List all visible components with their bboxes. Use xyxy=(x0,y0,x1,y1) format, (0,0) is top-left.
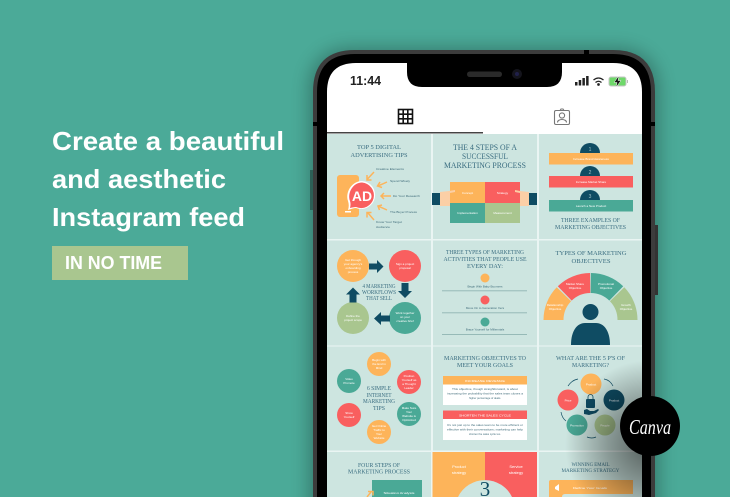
matrix: Concept xyxy=(462,191,473,195)
heading: EVERY DAY: xyxy=(467,263,503,270)
card: sales cycle xyxy=(443,410,527,440)
circles: Define the xyxy=(346,314,360,318)
circles: your agency's xyxy=(344,262,363,266)
screen xyxy=(327,63,650,497)
card: sales cycle: effective with their conversations; marketing can help xyxy=(447,428,523,432)
heading: MARKETING PROCESS xyxy=(348,470,410,476)
circles: the End in xyxy=(372,362,386,366)
canva badge: Canva xyxy=(629,415,671,439)
cell: three types xyxy=(433,240,537,346)
circles xyxy=(558,374,624,436)
heading: INTERNET xyxy=(366,392,392,399)
circles: Price xyxy=(565,398,572,402)
circles: Traffic to xyxy=(373,428,385,432)
heading: 6 SIMPLE xyxy=(367,385,391,392)
cell: four steps xyxy=(327,452,431,497)
step: situation analysis: Situation Analysis xyxy=(384,491,415,495)
labels: Audience xyxy=(376,225,390,229)
circles: Begin with xyxy=(372,358,386,362)
heading: ACTIVITIES THAT PEOPLE USE xyxy=(444,256,527,263)
list: Begin With Baby Boomers xyxy=(467,284,503,288)
circles: on your xyxy=(400,315,410,319)
circles: project scope xyxy=(344,318,362,322)
circles: Your xyxy=(376,432,382,436)
circles: Website xyxy=(374,436,385,440)
wifi xyxy=(594,78,604,85)
circles: a Thought xyxy=(402,382,416,386)
heading: THREE TYPES OF MARKETING xyxy=(446,249,524,256)
cell: product and service strategy xyxy=(432,452,537,497)
heading: TYPES OF MARKETING xyxy=(556,250,627,257)
circles: creative brief xyxy=(396,319,414,323)
headline: and aesthetic xyxy=(52,164,226,194)
matrix: Measurement xyxy=(493,211,512,215)
icon: grid tab xyxy=(398,110,412,124)
bars: 2 xyxy=(589,170,592,176)
heading: MARKETING STRATEGY xyxy=(562,468,620,474)
heading xyxy=(562,462,620,474)
circles: Optimized xyxy=(402,418,416,422)
semicircle chart: Objective xyxy=(569,286,582,290)
circles xyxy=(337,250,421,334)
labels: The Buyer Process xyxy=(390,210,418,214)
heading: SUCCESSFUL xyxy=(462,152,508,161)
semicircle chart: Relationship xyxy=(547,303,564,307)
labels xyxy=(376,167,420,229)
circles: Yourself as xyxy=(402,378,417,382)
heading: OBJECTIVES xyxy=(572,258,611,265)
bars: 1 xyxy=(589,147,592,153)
circles: Product xyxy=(609,398,619,402)
labels: Creative Elements xyxy=(376,167,405,171)
semicircle chart xyxy=(544,273,638,320)
circles: Yourself xyxy=(344,415,355,419)
tab underline xyxy=(327,132,483,134)
heading: TOP 5 DIGITAL xyxy=(357,144,401,151)
semicircle chart: Market Share xyxy=(566,282,584,286)
cycle arrows xyxy=(561,379,613,438)
heading: ADVERTISING TIPS xyxy=(350,152,408,159)
heading xyxy=(556,251,626,263)
circles: Get Online xyxy=(372,424,387,428)
card: sales cycle: It's not just up to the sales team to be more efficient or xyxy=(447,423,523,427)
cell: product and service strategy: strategy xyxy=(509,470,523,475)
headline: Create a beautiful xyxy=(52,126,284,156)
icon: tagged tab xyxy=(554,109,570,124)
heading xyxy=(350,145,408,157)
cell: product and service strategy: Service xyxy=(509,464,523,469)
heading xyxy=(556,356,625,367)
card: revenue: increasing the probability that the sales team closes a xyxy=(447,392,523,396)
circles: Your xyxy=(406,410,412,414)
heading xyxy=(444,144,526,168)
cell: product and service strategy: Product xyxy=(452,464,467,469)
card: revenue: This objective, though straightforward, is about xyxy=(452,387,518,391)
semicircle chart: Objective xyxy=(549,307,562,311)
heading: MARKETING OBJECTIVES TO xyxy=(444,355,526,362)
cell: internet marketing tips xyxy=(327,346,431,450)
badge: in no time: IN NO TIME xyxy=(65,253,162,273)
circles: proposal xyxy=(399,266,411,270)
card: revenue: INCREASE REVENUE xyxy=(465,379,505,383)
circles xyxy=(337,352,421,444)
circles: People xyxy=(600,424,610,428)
bars: Increase Brand Awareness xyxy=(573,157,609,161)
badge: in no time xyxy=(52,246,188,280)
phone frame xyxy=(310,50,658,497)
cell: email strategy xyxy=(539,452,642,497)
card: sales cycle: SHORTEN THE SALES CYCLE xyxy=(459,414,511,418)
heading: MARKETING OBJECTIVES xyxy=(555,224,626,231)
heading: THREE EXAMPLES OF xyxy=(561,217,620,224)
circles: Product xyxy=(586,382,596,386)
matrix: Strategy xyxy=(497,191,509,195)
heading xyxy=(362,284,396,300)
canva badge xyxy=(620,396,680,456)
circles: onboarding xyxy=(345,266,361,270)
heading xyxy=(444,356,526,367)
card: sales cycle: shorten the sales cycle too. xyxy=(469,432,501,436)
card: revenue: higher percentage of deals. xyxy=(469,396,501,400)
circles: Show xyxy=(345,411,354,415)
heading xyxy=(555,218,626,229)
list xyxy=(442,274,527,335)
circles: Sign a project xyxy=(396,262,414,266)
bars: Launch a New Product xyxy=(576,204,606,208)
circles: Video xyxy=(345,377,353,381)
heading xyxy=(444,250,526,268)
heading: WORKFLOWS xyxy=(362,289,396,296)
notch xyxy=(407,60,562,87)
list: Brace Yourself for Millennials xyxy=(466,328,505,332)
cell: advertising tips xyxy=(327,134,431,239)
semicircle chart: Objective xyxy=(600,286,613,290)
circles: Leader xyxy=(404,386,414,390)
circles: Promotion xyxy=(570,424,584,428)
heading: 4 MARKETING xyxy=(362,283,396,290)
step: define goals: Define Your Goals xyxy=(573,486,608,490)
circles: Make Sure xyxy=(402,406,417,410)
cell: 5 Ps xyxy=(539,346,642,450)
arrows xyxy=(346,260,412,325)
heading: TIPS xyxy=(373,405,385,412)
circles: Website is xyxy=(402,414,416,418)
labels: Know Your Target xyxy=(376,220,402,224)
bars: 3 xyxy=(589,194,592,200)
cell: objectives to goals xyxy=(433,346,537,450)
signal xyxy=(575,76,589,86)
bars xyxy=(549,143,633,212)
circles: process xyxy=(348,270,359,274)
heading: WINNING EMAIL xyxy=(572,462,610,468)
circles: Get through xyxy=(345,258,361,262)
matrix: Implementation xyxy=(457,211,478,215)
arrows xyxy=(367,172,391,220)
status icons xyxy=(575,76,628,88)
heading: THE 4 STEPS OF A xyxy=(453,143,517,152)
status time: 11:44 xyxy=(350,73,382,88)
circles: Work together xyxy=(396,311,414,315)
cell: workflows xyxy=(327,240,431,346)
cell: types of objectives xyxy=(539,240,642,346)
heading: WHAT ARE THE 5 P'S OF xyxy=(556,356,626,362)
semicircle chart: Promotional xyxy=(598,282,614,286)
heading: MARKETING xyxy=(363,398,395,405)
headline xyxy=(52,126,284,232)
icon: phone with AD bubble: AD xyxy=(352,188,372,204)
bars: Increase Market Share xyxy=(576,180,606,184)
headline: Instagram feed xyxy=(52,202,245,232)
heading xyxy=(348,463,410,476)
matrix xyxy=(450,182,520,223)
phone shadow xyxy=(309,48,659,497)
labels: Do Your Research xyxy=(393,194,420,198)
labels: Spend Wisely xyxy=(390,179,411,183)
heading: THAT SELL xyxy=(366,295,392,302)
canva shadow xyxy=(560,355,650,497)
phone xyxy=(310,50,658,497)
card: revenue xyxy=(443,376,527,405)
circles: Promote xyxy=(343,381,355,385)
semicircle chart: Growth xyxy=(621,303,631,307)
cell: product and service strategy: strategy xyxy=(452,470,466,475)
battery xyxy=(609,76,628,88)
heading xyxy=(363,386,395,410)
heading: FOUR STEPS OF xyxy=(358,463,401,469)
heading: MARKETING PROCESS xyxy=(444,161,526,170)
icon: person xyxy=(571,304,610,345)
list: Move On to Generation Xers xyxy=(466,306,505,310)
hands xyxy=(432,190,537,206)
circles: Position xyxy=(404,374,415,378)
cell: three examples xyxy=(539,134,642,239)
semicircle chart: Objective xyxy=(620,307,633,311)
heading: MARKETING? xyxy=(572,363,609,369)
icon: hand with bag xyxy=(584,394,599,415)
circles: Mind xyxy=(376,366,383,370)
heading: MEET YOUR GOALS xyxy=(457,362,513,369)
cell: 4 steps xyxy=(432,134,537,239)
